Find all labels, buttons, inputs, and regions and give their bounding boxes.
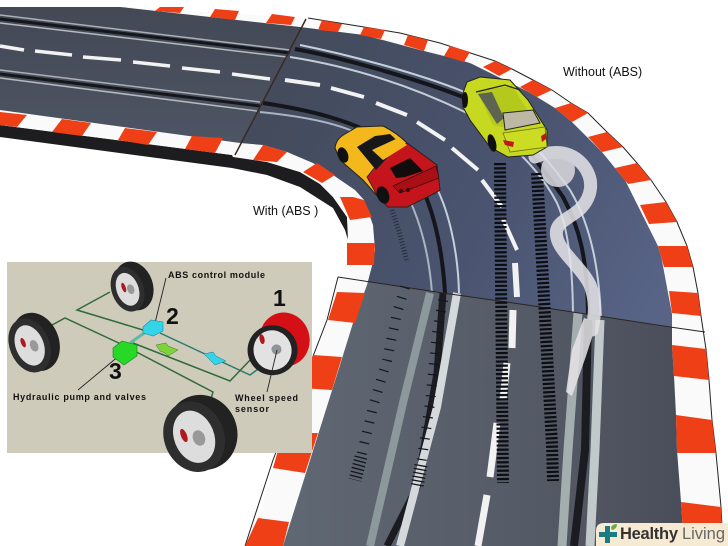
seams between track sections <box>235 19 705 332</box>
wheel: rear left <box>0 305 68 380</box>
road section: straight bottom <box>283 277 684 546</box>
tyre smoke: car without ABS <box>535 152 597 396</box>
label: without ABS: Without (ABS) <box>563 65 642 79</box>
wheel: front bottom <box>152 384 249 482</box>
icon: ABS control module cube <box>143 320 163 336</box>
brake lines <box>52 292 277 402</box>
wheel: rear top <box>104 256 160 317</box>
road section: straight top-left <box>0 7 308 150</box>
skid marks: car with ABS <box>355 210 443 487</box>
number 2: 2 <box>166 303 179 329</box>
number 1: 1 <box>273 285 286 311</box>
label: Hydraulic pump and valves: Hydraulic pump and valves <box>13 392 146 402</box>
label: ABS control module: ABS control module <box>168 270 265 280</box>
curb: inner red and white with black side wall <box>0 110 375 546</box>
arrow: cyan sensor signal <box>204 352 226 365</box>
road section: curve <box>238 20 675 330</box>
logo: Healthy Living <box>596 523 728 546</box>
skid marks: car without ABS <box>500 163 553 483</box>
panel: ABS system diagram <box>0 256 316 482</box>
leader lines <box>78 278 277 392</box>
label: Wheel speed sensor: sensor <box>235 404 269 414</box>
wheel: front right with red tyre <box>241 308 316 380</box>
icon: hydraulic pump cube <box>113 341 137 365</box>
logo: Healthy Living: Healthy <box>620 525 679 543</box>
arrow: green return flow <box>156 343 178 356</box>
label: with ABS: With (ABS ) <box>253 204 318 218</box>
car: lime green without ABS <box>462 77 547 157</box>
car: red and yellow with ABS <box>335 126 440 207</box>
logo: Healthy Living: Living <box>682 525 725 543</box>
label: Wheel speed sensor: Wheel speed <box>235 393 298 403</box>
number 3: 3 <box>109 358 122 384</box>
